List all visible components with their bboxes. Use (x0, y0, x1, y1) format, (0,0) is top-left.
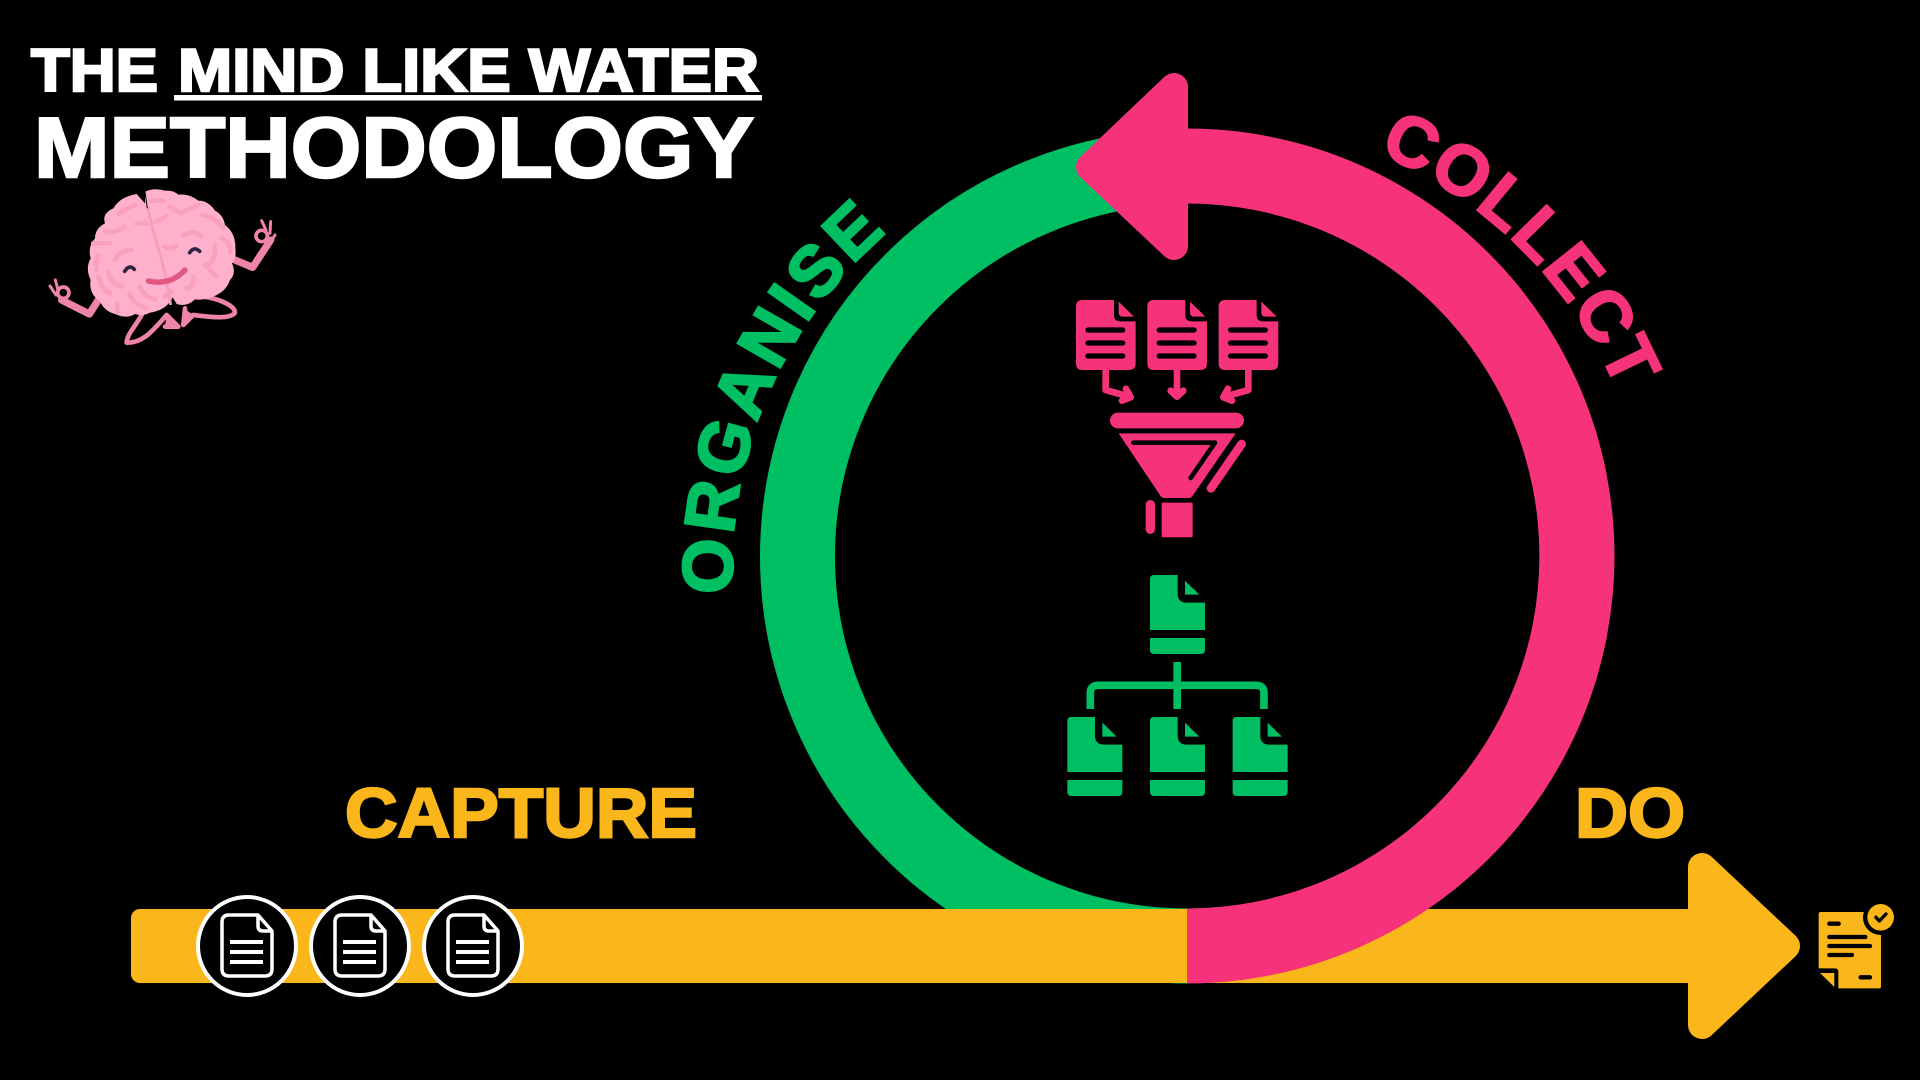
icon: document circle 2 (311, 897, 409, 995)
green arc: organise (798, 167, 1187, 946)
heading: collect: COLLECT (1387, 116, 1663, 378)
icon: document circle 3 (424, 897, 522, 995)
heading: do: DO (1575, 774, 1685, 852)
icon: document hierarchy (1067, 575, 1288, 796)
icon: documents into funnel (1076, 300, 1278, 537)
icon: completed document (1819, 900, 1898, 988)
yellow timeline bar with arrow (131, 867, 1786, 1025)
heading: organise: ORGANISE (682, 198, 886, 592)
title: MIND LIKE WATER (178, 37, 759, 104)
icon: meditating brain mascot (50, 189, 275, 343)
title: THE (31, 37, 158, 104)
title (31, 37, 762, 196)
icon: document circle 1 (198, 897, 296, 995)
pink arc with arrowhead: collect (1090, 87, 1614, 984)
heading: capture: CAPTURE (345, 774, 697, 852)
title: METHODOLOGY (34, 101, 754, 196)
